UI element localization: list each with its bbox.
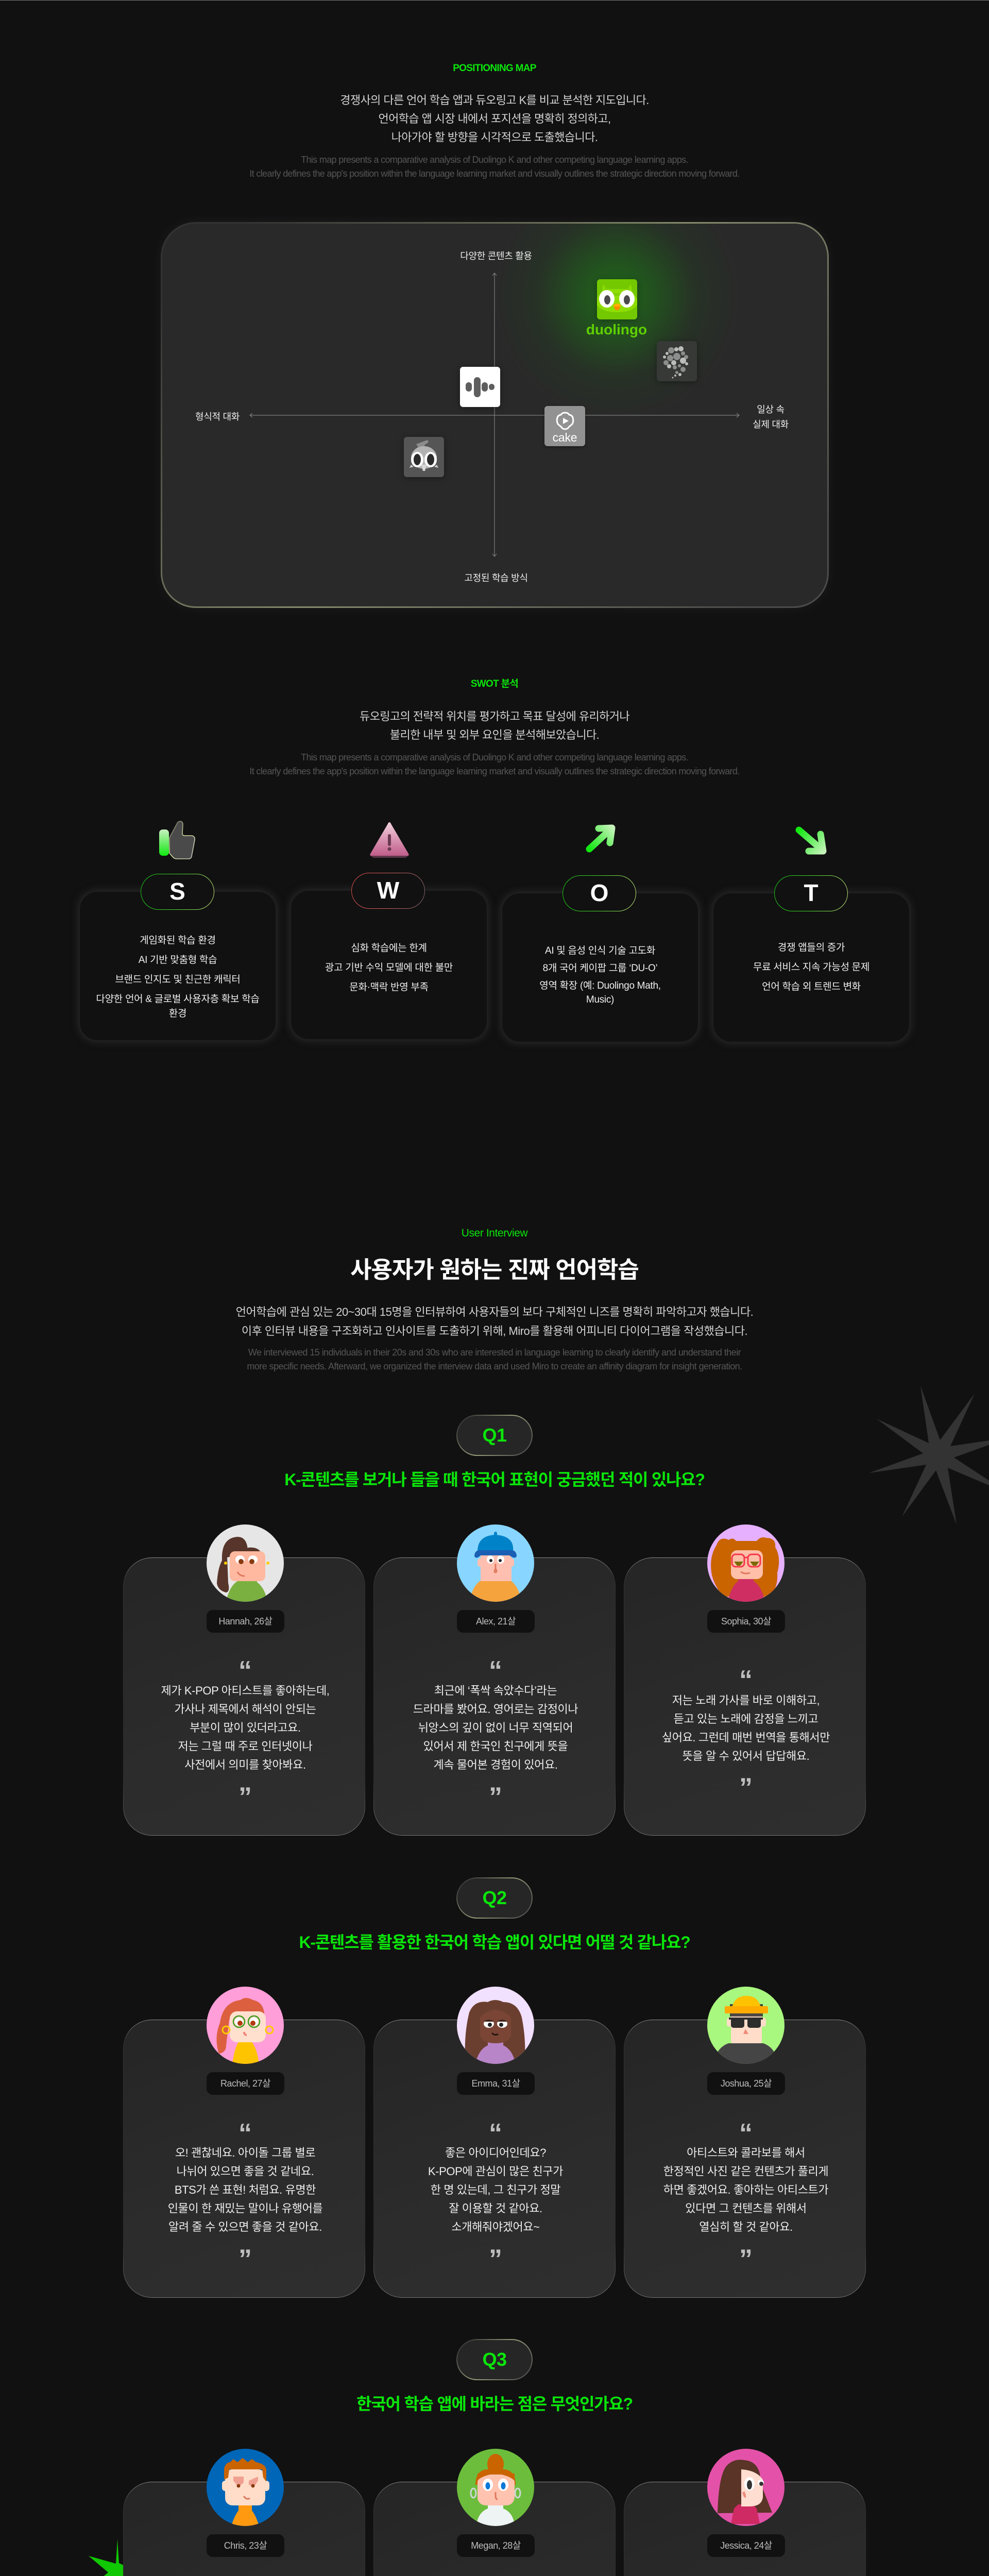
axis label: top: 다양한 콘텐츠 활용	[460, 251, 532, 261]
interview intro text: 이후 인터뷰 내용을 구조화하고 인사이트를 도출하기 위해, Miro를 활용해 어피니티 다이어그램을 작성했습니다.	[242, 1325, 747, 1337]
decorative star: gray	[869, 1386, 989, 1524]
badge: Q1	[456, 1415, 533, 1456]
quote: Joshua: 열심히 할 것 같아요.	[699, 2221, 793, 2233]
quote: Sophia: 싶어요. 그런데 매번 번역을 통해서만	[662, 1731, 830, 1744]
interview intro text: 언어학습에 관심 있는 20~30대 15명을 인터뷰하여 사용자들의 보다 구체적인 니즈를 명확히 파악하고자 했습니다.	[236, 1306, 753, 1318]
name tag: Joshua: Joshua, 25살	[721, 2078, 772, 2089]
positioning map intro text: 경쟁사의 다른 언어 학습 앱과 듀오링고 K를 비교 분석한 지도입니다.	[340, 94, 649, 107]
strengths text: 브랜드 인지도 및 친근한 캐릭터	[115, 974, 241, 985]
interview intro text	[236, 1306, 753, 1337]
cake wordmark: cake	[553, 431, 577, 444]
badge: S	[141, 874, 214, 910]
strengths text: 환경	[169, 1008, 186, 1019]
swot intro text: 불리한 내부 및 외부 요인을 분석해보았습니다.	[390, 728, 599, 741]
panel: positioning map	[161, 222, 829, 608]
name tag: Sophia	[707, 1610, 785, 1633]
opportunities text	[539, 945, 661, 1005]
quote: Emma: 잘 이용할 것 같아요.	[449, 2202, 542, 2215]
swot english text	[249, 752, 740, 776]
badge: S: S	[169, 878, 185, 905]
swot intro text: 듀오링고의 전략적 위치를 평가하고 목표 달성에 유리하거나	[360, 710, 629, 723]
icon: speech balloon app	[656, 341, 697, 382]
swot intro text	[360, 710, 629, 741]
quote: Rachel: 나뉘어 있으면 좋을 것 같네요.	[177, 2165, 314, 2178]
decorative star: green	[88, 2537, 125, 2576]
section label: positioning map: POSITIONING MAP	[453, 63, 536, 74]
badge: T	[774, 875, 848, 911]
top edge line	[0, 0, 989, 1]
name tag: Hannah	[207, 1610, 284, 1633]
quote: Alex	[413, 1684, 578, 1771]
quote mark open: “	[238, 2119, 252, 2148]
question 3: 한국어 학습 앱에 바라는 점은 무엇인가요?	[356, 2395, 633, 2413]
swot english text: It clearly defines the app's position within the language learning market and visually outlines the strategic direction moving forward.	[249, 766, 740, 776]
badge: O: O	[590, 879, 608, 906]
section label: user interview: User Interview	[462, 1227, 527, 1239]
weaknesses text: 문화·맥락 반영 부족	[349, 982, 429, 993]
strengths text: 게임화된 학습 환경	[140, 935, 216, 946]
card: Emma	[373, 2020, 616, 2298]
quote mark close: ”	[238, 2244, 252, 2274]
quote: Hannah: 부분이 많이 있더라고요.	[190, 1721, 301, 1734]
threats text: 무료 서비스 지속 가능성 문제	[753, 962, 869, 973]
quote mark open: “	[739, 1665, 753, 1695]
panel: threats	[713, 893, 909, 1042]
opportunities text: 8개 국어 케이팝 그룹 ‘DU-O’	[543, 963, 657, 974]
avatar: Chris	[207, 2449, 284, 2526]
avatar: Jessica	[707, 2449, 785, 2526]
positioning map english text	[249, 155, 740, 179]
name tag: Emma	[457, 2072, 535, 2095]
axis label: right: 실제 대화	[753, 419, 789, 430]
chart axes	[249, 273, 740, 557]
card: Alex	[373, 1557, 616, 1836]
card: Sophia	[624, 1557, 866, 1836]
quote: Joshua: 한정적인 사진 같은 컨텐츠가 풀리게	[663, 2165, 828, 2178]
badge: T: T	[804, 879, 819, 906]
card: Jessica	[624, 2482, 866, 2576]
quote: Emma: K-POP에 관심이 많은 친구가	[428, 2165, 563, 2178]
card: Hannah	[123, 1557, 365, 1836]
name tag: Chris: Chris, 23살	[224, 2540, 267, 2551]
name tag: Rachel: Rachel, 27살	[220, 2078, 270, 2089]
quote: Emma: 소개해줘야겠어요~	[451, 2221, 540, 2233]
opportunities text: 영역 확장 (예: Duolingo Math,	[539, 980, 661, 991]
quote mark open: “	[489, 2119, 502, 2148]
positioning map english text: It clearly defines the app's position within the language learning market and visually outlines the strategic direction moving forward.	[249, 168, 740, 179]
quote: Emma	[428, 2146, 563, 2233]
quote: Alex: 있어서 제 한국인 친구에게 뜻을	[423, 1740, 568, 1753]
quote mark close: ”	[739, 2244, 753, 2274]
quote: Emma: 한 명 있는데, 그 친구가 정말	[431, 2183, 560, 2196]
name tag: Megan: Megan, 28살	[471, 2540, 521, 2551]
threats text: 경쟁 앱들의 증가	[778, 942, 845, 953]
quote: Sophia	[662, 1694, 830, 1762]
axis label: right	[753, 404, 789, 430]
quote: Hannah: 가사나 제목에서 해석이 안되는	[174, 1703, 316, 1716]
icon: up arrow	[586, 824, 615, 852]
name tag: Hannah: Hannah, 26살	[218, 1616, 272, 1626]
badge: Q1: Q1	[482, 1425, 507, 1446]
section label: swot: SWOT 분석	[471, 679, 518, 689]
axis label: bottom: 고정된 학습 방식	[464, 573, 528, 583]
badge: O	[562, 875, 636, 911]
threats text	[753, 942, 869, 992]
quote: Hannah	[161, 1684, 330, 1771]
quote: Sophia: 저는 노래 가사를 바로 이해하고,	[672, 1694, 820, 1707]
interview english text: We interviewed 15 individuals in their 20s and 30s who are interested in language learning to clearly identify and understand their	[248, 1347, 741, 1358]
quote: Joshua: 하면 좋겠어요. 좋아하는 아티스트가	[663, 2183, 828, 2196]
badge: W	[351, 873, 425, 909]
badge: W: W	[377, 877, 399, 904]
badge: Q3: Q3	[482, 2349, 507, 2370]
positioning map intro text: 나아가야 할 방향을 시각적으로 도출했습니다.	[391, 131, 598, 144]
quote: Hannah: 제가 K-POP 아티스트를 좋아하는데,	[161, 1684, 330, 1697]
quote mark close: ”	[238, 1782, 252, 1812]
panel: strengths	[80, 892, 276, 1040]
quote: Alex: 드라마를 봤어요. 영어로는 감정이나	[413, 1703, 578, 1716]
quote mark open: “	[238, 1656, 252, 1686]
weaknesses text: 광고 기반 수익 모델에 대한 불만	[325, 962, 453, 973]
avatar: Joshua	[707, 1987, 785, 2064]
badge: Q2	[456, 1877, 533, 1919]
quote: Alex: 뉘앙스의 깊이 없이 너무 직역되어	[418, 1721, 573, 1734]
card: Megan	[373, 2482, 616, 2576]
avatar: Megan	[457, 2449, 534, 2526]
opportunities text: AI 및 음성 인식 기술 고도화	[545, 945, 655, 956]
quote: Joshua: 아티스트와 콜라보를 해서	[687, 2146, 805, 2159]
avatar: Emma	[457, 1987, 534, 2064]
quote: Alex: 최근에 ‘폭싹 속았수다’라는	[434, 1684, 557, 1697]
name tag: Sophia: Sophia, 30살	[721, 1616, 771, 1626]
icon: white sound app	[460, 365, 500, 411]
swot english text: This map presents a comparative analysis of Duolingo K and other competing language learning apps.	[301, 752, 688, 762]
avatar: Rachel	[207, 1987, 284, 2064]
card: Rachel	[123, 2020, 365, 2298]
quote mark open: “	[489, 1656, 502, 1686]
duolingo glow	[493, 173, 740, 420]
axis label: right: 일상 속	[757, 404, 785, 415]
name tag: Joshua	[707, 2072, 785, 2095]
quote: Sophia: 듣고 있는 노래에 감정을 느끼고	[674, 1713, 818, 1725]
quote: Joshua	[627, 2144, 864, 2236]
quote mark close: ”	[489, 2244, 502, 2274]
opportunities text: Music)	[586, 994, 614, 1005]
quote: Emma: 좋은 아이디어인데요?	[445, 2146, 546, 2159]
strengths text: 다양한 언어 & 글로벌 사용자층 확보 학습	[96, 994, 260, 1005]
positioning map intro text: 언어학습 앱 시장 내에서 포지션을 명확히 정의하고,	[378, 112, 611, 125]
card: Joshua	[624, 2020, 866, 2298]
quote: Hannah: 저는 그럴 때 주로 인터넷이나	[178, 1740, 312, 1753]
quote: Joshua: 있다면 그 컨텐츠를 위해서	[685, 2202, 807, 2215]
name tag: Alex: Alex, 21살	[476, 1616, 516, 1626]
badge: Q2: Q2	[482, 1887, 507, 1908]
icon: gray owl app	[404, 437, 444, 478]
question 1: K-콘텐츠를 보거나 들을 때 한국어 표현이 궁금했던 적이 있나요?	[284, 1470, 705, 1489]
weaknesses text	[325, 943, 453, 993]
quote: Rachel: 오! 괜찮네요. 아이돌 그룹 별로	[175, 2146, 315, 2159]
quote: Hannah: 사전에서 의미를 찾아봐요.	[184, 1758, 306, 1771]
strengths text	[96, 935, 260, 1019]
badge: Q3	[456, 2339, 533, 2380]
name tag: Alex	[457, 1610, 535, 1633]
icon: thumbs up	[159, 821, 195, 859]
question 2: K-콘텐츠를 활용한 한국어 학습 앱이 있다면 어떨 것 같나요?	[299, 1933, 690, 1952]
quote: Rachel: BTS가 쓴 표현! 처럼요. 유명한	[175, 2183, 316, 2196]
positioning map intro text	[340, 94, 649, 144]
icon: warning triangle	[370, 822, 409, 858]
card: Chris	[123, 2482, 365, 2576]
icon: cake app	[544, 406, 585, 446]
interview english text: more specific needs. Afterward, we organized the interview data and used Miro to create an affinity diagram for insight generation.	[247, 1361, 742, 1371]
interview english text	[247, 1347, 742, 1371]
name tag: Megan	[457, 2534, 535, 2557]
threats text: 언어 학습 외 트렌드 변화	[762, 981, 861, 992]
name tag: Rachel	[207, 2072, 284, 2095]
quote mark close: ”	[739, 1773, 753, 1803]
quote: Rachel: 알려 줄 수 있으면 좋을 것 같아요.	[168, 2221, 322, 2233]
duolingo wordmark: duolingo	[586, 321, 647, 337]
panel: opportunities	[502, 893, 698, 1042]
quote: Sophia: 뜻을 알 수 있어서 답답해요.	[683, 1750, 809, 1762]
name tag: Emma: Emma, 31살	[471, 2078, 520, 2089]
panel: weaknesses	[291, 891, 487, 1039]
quote: Rachel	[168, 2146, 322, 2233]
icon: duolingo app	[595, 278, 639, 322]
avatar: Sophia	[707, 1524, 785, 1602]
name tag: Jessica	[707, 2534, 785, 2557]
positioning map english text: This map presents a comparative analysis of Duolingo K and other competing language learning apps.	[301, 155, 688, 165]
quote: Alex: 계속 물어본 경험이 있어요.	[433, 1758, 558, 1771]
name tag: Jessica: Jessica, 24살	[720, 2540, 772, 2551]
interview title: 사용자가 원하는 진짜 언어학습	[350, 1257, 639, 1283]
quote mark close: ”	[489, 1782, 502, 1812]
weaknesses text: 심화 학습에는 한계	[351, 943, 427, 954]
name tag: Chris	[207, 2534, 284, 2557]
quote mark open: “	[739, 2119, 753, 2148]
icon: down arrow	[795, 826, 826, 854]
avatar: Alex	[457, 1524, 534, 1602]
axis label: left: 형식적 대화	[195, 412, 240, 422]
strengths text: AI 기반 맞춤형 학습	[139, 955, 217, 965]
quote: Rachel: 인물이 한 재밌는 말이나 유행어를	[168, 2202, 322, 2215]
avatar: Hannah	[207, 1524, 284, 1602]
